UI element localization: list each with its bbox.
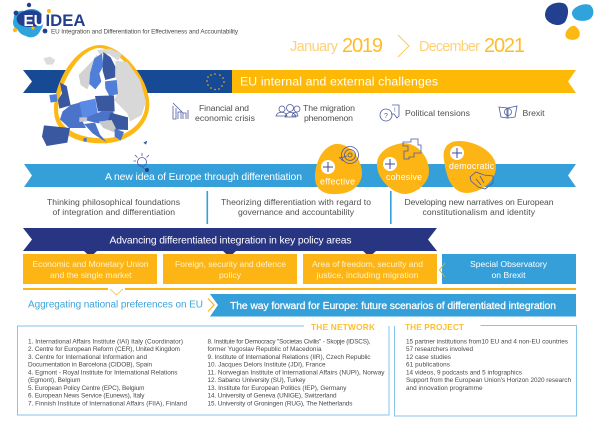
box: Economic and Monetary Union: and the single market [50,270,132,280]
logo [13,3,239,37]
icon: financial crisis chart [173,103,188,119]
list: project facts: 12 case studies [406,354,451,361]
list: partners 1 to 7: 6. European News Service (Eunews), Italy [28,393,145,400]
project dates: December [419,39,480,55]
list: partners 8 to 15: 9. Institute of International Relations (IIR), Czech Republic [208,354,371,361]
icon: speech bubbles: ! [394,108,396,114]
list: project facts: and innovation programme [406,385,483,392]
list: partners 8 to 15: 8. Institute for Democracy "Societas Civilis" - Skopje (IDSCS), [208,338,371,346]
badge: cohesive [377,139,429,194]
label: financial crisis [195,103,256,123]
list: partners 1 to 7: 4. Egmont - Royal Institute for International Relations [28,370,178,376]
text: theorizing differentiation [221,197,371,217]
panel: the project [394,322,576,416]
yellow divider with chevron [23,288,576,295]
text: new narratives: Developing new narratives on European [404,197,554,207]
arrow: observatory to migration [440,263,445,277]
box: Area of freedom, security and justice: justice, including migration [316,270,419,280]
icon: speech bubbles [380,105,399,121]
label: migration [303,103,355,123]
label: financial crisis: Financial and [199,103,249,113]
list: partners 8 to 15: 15. University of Groningen (RUG), The Netherlands [208,400,352,408]
text: theorizing differentiation: governance and accountability [238,207,355,217]
banner: Advancing differentiated integration [23,228,437,257]
icon: EU stars [206,73,225,90]
list: partners 1 to 7: Documentation in Barcelona (CIDOB), Spain [28,362,152,369]
label: Brexit: Brexit [522,108,545,118]
icon: puzzle [403,139,421,159]
label: migration: The migration [303,103,355,113]
list: partners 8 to 15: 12. Sabancı University (SU), Turkey [208,377,306,384]
three research themes [47,191,554,224]
list: partners 1 to 7: 2. Centre for European Reform (CER), United Kingdom [28,346,180,353]
box: Economic and Monetary Union [23,254,157,284]
label: financial crisis: economic crisis [195,113,256,123]
project dates: January [290,39,339,55]
heading: the project: THE PROJECT [405,322,464,332]
box: Special Observatory on Brexit [442,254,576,284]
list: partners 8 to 15 [208,338,385,408]
text: new narratives [404,197,554,217]
icon: speech bubbles: ? [384,113,388,120]
list: partners 8 to 15: 13. Institute for European Politics (IEP), Germany [208,385,347,392]
list: partners 1 to 7: 1. International Affairs Institute (IAI) Italy (Coordinator) [28,338,183,346]
arrow: to way forward [208,298,214,312]
list: project facts: 57 researchers involved [406,346,473,353]
box: Special Observatory on Brexit: on Brexit [492,270,526,280]
label: political tensions: Political tensions [405,108,471,118]
project dates: 2019 [342,35,383,57]
banner: A new idea of Europe through differentiation [24,153,576,187]
box: Economic and Monetary Union: Economic and Monetary Union [32,259,149,269]
list: project facts: 15 partner institutions from10 EU and 4 non-EU countries [406,338,568,346]
list: partners 8 to 15: 14. University of Geneva (UNIGE), Switzerland [208,393,337,400]
badge: cohesive: cohesive [386,172,422,182]
icon: handshake [470,172,493,189]
list: partners 8 to 15: former Yugoslav Republic of Macedonia [208,346,322,353]
list: partners 1 to 7: (Egmont), Belgium [28,377,80,384]
banner: Advancing differentiated integration: Advancing differentiated integration in key policy areas [110,236,352,246]
badge: effective [315,144,362,194]
box: Foreign, security and defence policy: Foreign, security and defence [175,259,286,269]
banner: A new idea of Europe through differentiation: A new idea of Europe through differentiation [105,172,302,183]
box: Foreign, security and defence policy [163,254,297,284]
banner: The way forward for Europe: The way forward for Europe: future scenarios of differentiated integration [230,301,556,312]
box: Area of freedom, security and justice: Area of freedom, security and [312,259,423,269]
box: Foreign, security and defence policy: policy [219,270,242,280]
logo: IDEA [46,11,86,30]
list: partners 8 to 15: 10. Jacques Delors Institute (JDI), France [208,362,326,369]
badge: democratic: democratic [449,161,495,171]
list: partners 1 to 7: 5. European Policy Centre (EPC), Belgium [28,385,144,392]
label: migration: phenomenon [304,113,353,123]
banner: EU internal and external challenges: EU internal and external challenges [240,74,438,88]
icon: Brexit flags [499,106,517,118]
panel: the network [18,322,389,415]
text: philosophical foundations [47,197,180,217]
icon: target [339,146,358,164]
banner: The way forward for Europe [210,294,576,316]
badge: democratic [444,141,496,193]
project dates: 2021 [484,35,525,57]
icon: light bulb [134,153,149,172]
list: project facts: Support from the European Union's Horizon 2020 research [406,377,571,384]
logo: EU Integration and Differentiation for Effectiveness and Accountability [51,28,239,36]
challenges row [173,103,545,123]
icon: migration people [276,104,300,117]
box: Area of freedom, security and justice [303,254,437,284]
list: partners 1 to 7: 7. Finnish Institute of International Affairs (FIIA), Finland [28,400,187,408]
decorative blobs top right [545,3,593,40]
list: partners 1 to 7: 3. Centre for International Information and [28,354,147,361]
box: Special Observatory on Brexit: Special Observatory [470,259,548,269]
list: project facts [406,338,571,392]
text: philosophical foundations: Thinking philosophical foundations [47,197,180,207]
map of Europe in egg frame [42,45,149,146]
logo: EU [24,13,44,30]
text: new narratives: constitutionalism and identity [422,207,536,217]
banner: EU internal and external challenges [23,70,576,93]
text: philosophical foundations: of integration and differentiation [52,207,175,217]
heading: the network: THE NETWORK [311,322,375,332]
list: partners 8 to 15: 11. Norwegian Institute of International Affairs (NUPI), Norway [208,370,385,376]
project dates [290,35,525,57]
text: theorizing differentiation: Theorizing differentiation with regard to [221,197,371,207]
list: project facts: 14 videos, 9 podcasts and 5 infographics [406,370,522,376]
badge: effective: effective [320,176,355,186]
list: project facts: 61 publications [406,362,450,369]
text: Aggregating national preferences: Aggregating national preferences on EU [28,300,203,310]
arrow: date chevron [398,35,409,57]
list: partners 1 to 7 [28,338,187,408]
